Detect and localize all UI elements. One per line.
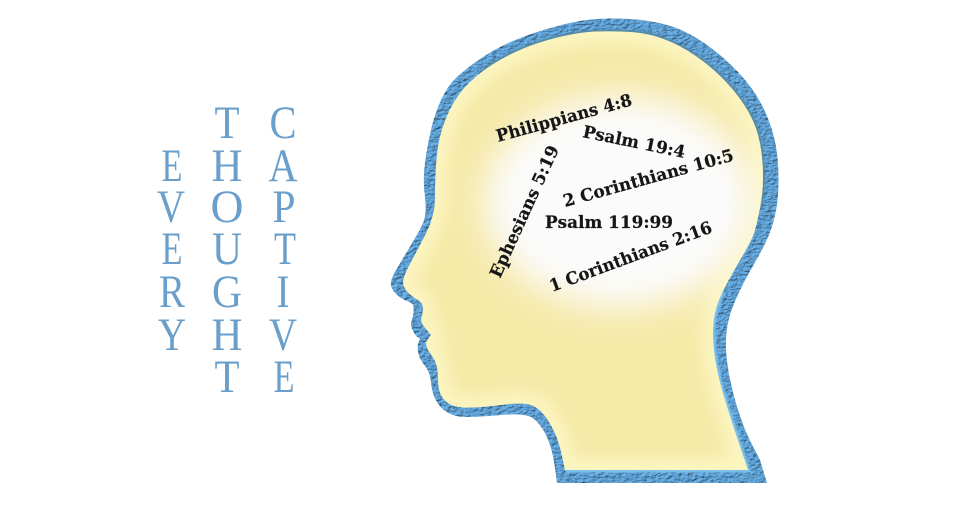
column: CAPTIVE: A xyxy=(268,140,298,192)
column: CAPTIVE xyxy=(268,97,298,403)
column: EVERY: V xyxy=(157,181,185,233)
column: THOUGHT: O xyxy=(210,181,244,233)
title: every thought captive xyxy=(157,97,298,403)
textured blue outline xyxy=(391,18,778,483)
infographic xyxy=(157,18,778,483)
column: EVERY: R xyxy=(159,266,186,318)
bevel shadow along top of the rim xyxy=(483,31,763,208)
column: THOUGHT: H xyxy=(212,309,242,361)
column: CAPTIVE: C xyxy=(270,97,296,149)
reference: Psalm 19:4: Psalm 19:4 xyxy=(581,122,687,163)
column: THOUGHT: T xyxy=(214,97,240,149)
column: EVERY xyxy=(157,140,186,361)
inner face fill with glow xyxy=(403,31,763,470)
column: CAPTIVE: V xyxy=(269,309,297,361)
scripture references xyxy=(486,91,736,297)
column: THOUGHT: G xyxy=(212,266,242,318)
column: CAPTIVE: P xyxy=(272,181,296,233)
column: THOUGHT: T xyxy=(214,351,240,403)
reference: 2 Corinthians 10:5: 2 Corinthians 10:5 xyxy=(561,146,736,212)
bevel highlight along bottom of the rim xyxy=(565,292,748,470)
column: THOUGHT xyxy=(210,97,244,403)
column: CAPTIVE: I xyxy=(276,266,290,318)
reference: Psalm 119:99: Psalm 119:99 xyxy=(545,213,673,233)
column: CAPTIVE: E xyxy=(274,351,294,403)
column: EVERY: Y xyxy=(158,309,186,361)
column: EVERY: E xyxy=(162,223,182,275)
reference: 1 Corinthians 2:16: 1 Corinthians 2:16 xyxy=(547,218,715,297)
reference: Ephesians 5:19: Ephesians 5:19 xyxy=(486,143,564,281)
head silhouette xyxy=(380,10,780,490)
reference: Philippians 4:8: Philippians 4:8 xyxy=(494,91,634,147)
column: THOUGHT: H xyxy=(212,140,242,192)
column: THOUGHT: U xyxy=(212,223,242,275)
column: CAPTIVE: T xyxy=(274,223,296,275)
column: EVERY: E xyxy=(162,140,182,192)
